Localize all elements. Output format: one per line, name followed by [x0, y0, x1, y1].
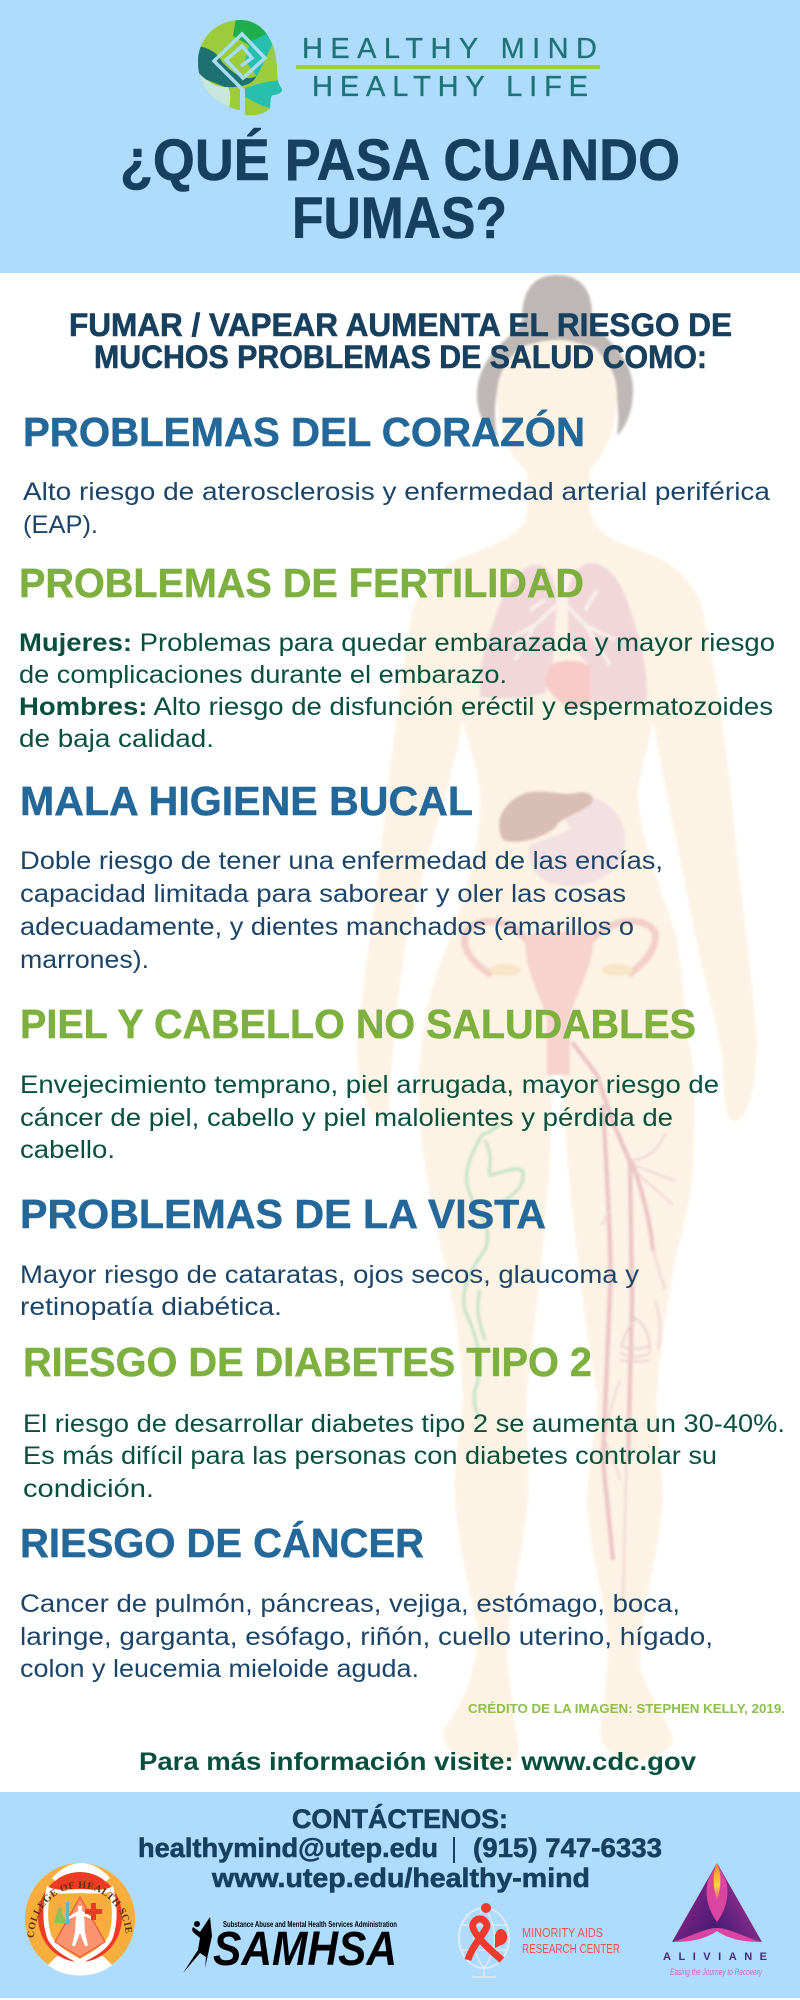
stomach — [529, 794, 625, 886]
section: problemas de fertilidad: PROBLEMAS DE FERTILIDAD — [19, 560, 584, 606]
contact block — [138, 1803, 662, 1893]
title — [120, 128, 680, 251]
section: problemas de la vista: PROBLEMAS DE LA VISTA — [20, 1191, 546, 1237]
section: piel y cabello no saludables: cáncer de piel, cabello y piel malolientes y pérdida de — [20, 1104, 673, 1132]
header band — [0, 0, 800, 273]
logo: aliviane: ALIVIANE — [663, 1951, 767, 1963]
image credit: CRÉDITO DE LA IMAGEN: STEPHEN KELLY, 2019. — [468, 1701, 785, 1716]
section: piel y cabello no saludables: Envejecimiento temprano, piel arrugada, mayor riesgo de — [20, 1071, 719, 1099]
section: problemas de fertilidad: de baja calidad. — [19, 725, 214, 753]
section: piel y cabello no saludables: PIEL Y CABELLO NO SALUDABLES — [20, 1001, 696, 1047]
lymphatic vessels — [464, 1125, 523, 1420]
section: mala higiene bucal: Doble riesgo de tener una enfermedad de las encías, — [20, 847, 663, 875]
contact block: CONTÁCTENOS: — [292, 1803, 508, 1834]
logo: SAMHSA: SAMHSA — [213, 1923, 397, 1976]
logo: minority aids research center — [459, 1903, 620, 1977]
more information line: Para más información visite: www.cdc.gov — [139, 1748, 696, 1776]
section: riesgo de diabetes tipo 2: RIESGO DE DIABETES TIPO 2 — [23, 1339, 592, 1385]
section: riesgo de cáncer: Cancer de pulmón, páncreas, vejiga, estómago, boca, — [20, 1590, 680, 1618]
section: mala higiene bucal: marrones). — [20, 946, 149, 974]
icon: healthy mind head logo — [198, 20, 282, 116]
logo: college of health sciences seal — [25, 1863, 135, 1976]
arteries — [572, 1042, 653, 1560]
title: FUMAS? — [292, 186, 507, 251]
section: problemas de la vista: Mayor riesgo de cataratas, ojos secos, glaucoma y — [20, 1261, 640, 1289]
illustration: human body silhouette with organs — [357, 275, 757, 1765]
section: mala higiene bucal: capacidad limitada para saborear y oler las cosas — [20, 880, 626, 908]
logo: aliviane: Easing the Journey to Recovery — [670, 1967, 762, 1977]
hair — [477, 275, 633, 437]
section: riesgo de diabetes tipo 2: condición. — [23, 1475, 154, 1503]
subtitle: FUMAR / VAPEAR AUMENTA EL RIESGO DE — [69, 307, 732, 343]
logo: SAMHSA: Substance Abuse and Mental Health Services Administration — [223, 1920, 397, 1929]
section: problemas de la vista: retinopatía diabética. — [20, 1293, 282, 1321]
logo wordmark: Healthy Mind Healthy Life — [296, 33, 600, 103]
section: piel y cabello no saludables — [20, 1001, 719, 1164]
logo wordmark: Healthy Mind Healthy Life: HEALTHY MIND — [302, 33, 597, 65]
subtitle — [69, 307, 732, 375]
contact block: (915) 747-6333 — [473, 1833, 662, 1863]
section: riesgo de cáncer — [20, 1520, 713, 1683]
section: problemas del corazón — [23, 409, 770, 539]
section: riesgo de diabetes tipo 2 — [23, 1339, 785, 1503]
body silhouette — [357, 470, 757, 1765]
liver — [499, 791, 593, 842]
footer band — [0, 1792, 800, 1998]
section: problemas de la vista — [20, 1191, 640, 1321]
section: riesgo de cáncer: RIESGO DE CÁNCER — [20, 1520, 424, 1566]
section: mala higiene bucal: MALA HIGIENE BUCAL — [20, 778, 473, 824]
section: problemas del corazón: Alto riesgo de aterosclerosis y enfermedad arterial periférica — [23, 478, 770, 506]
logo: minority aids research center: RESEARCH CENTER — [522, 1941, 620, 1956]
subtitle: MUCHOS PROBLEMAS DE SALUD COMO: — [94, 339, 707, 375]
logo wordmark: Healthy Mind Healthy Life: HEALTHY LIFE — [312, 71, 588, 103]
lungs — [480, 563, 647, 702]
face — [497, 340, 617, 484]
logo: minority aids research center: MINORITY AIDS — [522, 1925, 603, 1940]
section: piel y cabello no saludables: cabello. — [20, 1136, 115, 1164]
section: mala higiene bucal: adecuadamente, y dientes manchados (amarillos o — [20, 913, 634, 941]
heart — [545, 661, 590, 710]
section: riesgo de diabetes tipo 2: El riesgo de desarrollar diabetes tipo 2 se aumenta un 30-40%. — [23, 1410, 785, 1438]
contact block: healthymind@utep.edu — [138, 1833, 438, 1863]
section: problemas del corazón: (EAP). — [23, 511, 98, 539]
section: mala higiene bucal — [20, 778, 663, 974]
contact block: www.utep.edu/healthy-mind — [211, 1863, 590, 1893]
section: problemas de fertilidad: Hombres: Alto riesgo de disfunción eréctil y espermatozoides — [19, 693, 773, 721]
section: problemas de fertilidad: de complicaciones durante el embarazo. — [19, 661, 507, 689]
logo: aliviane — [663, 1863, 767, 1977]
knee ring — [620, 1318, 650, 1362]
title: ¿QUÉ PASA CUANDO — [120, 128, 680, 193]
arterial branches — [602, 1133, 675, 1600]
section: problemas del corazón: PROBLEMAS DEL CORAZÓN — [23, 409, 585, 455]
section: problemas de fertilidad — [19, 560, 775, 753]
section: problemas de fertilidad: Mujeres: Problemas para quedar embarazada y mayor riesgo — [19, 629, 775, 657]
section: riesgo de cáncer: laringe, garganta, esófago, riñón, cuello uterino, hígado, — [20, 1623, 713, 1651]
section: riesgo de cáncer: colon y leucemia mieloide aguda. — [20, 1655, 419, 1683]
uterus and fallopian tubes — [465, 921, 655, 1075]
section: riesgo de diabetes tipo 2: Es más difícil para las personas con diabetes controlar su — [23, 1442, 717, 1470]
